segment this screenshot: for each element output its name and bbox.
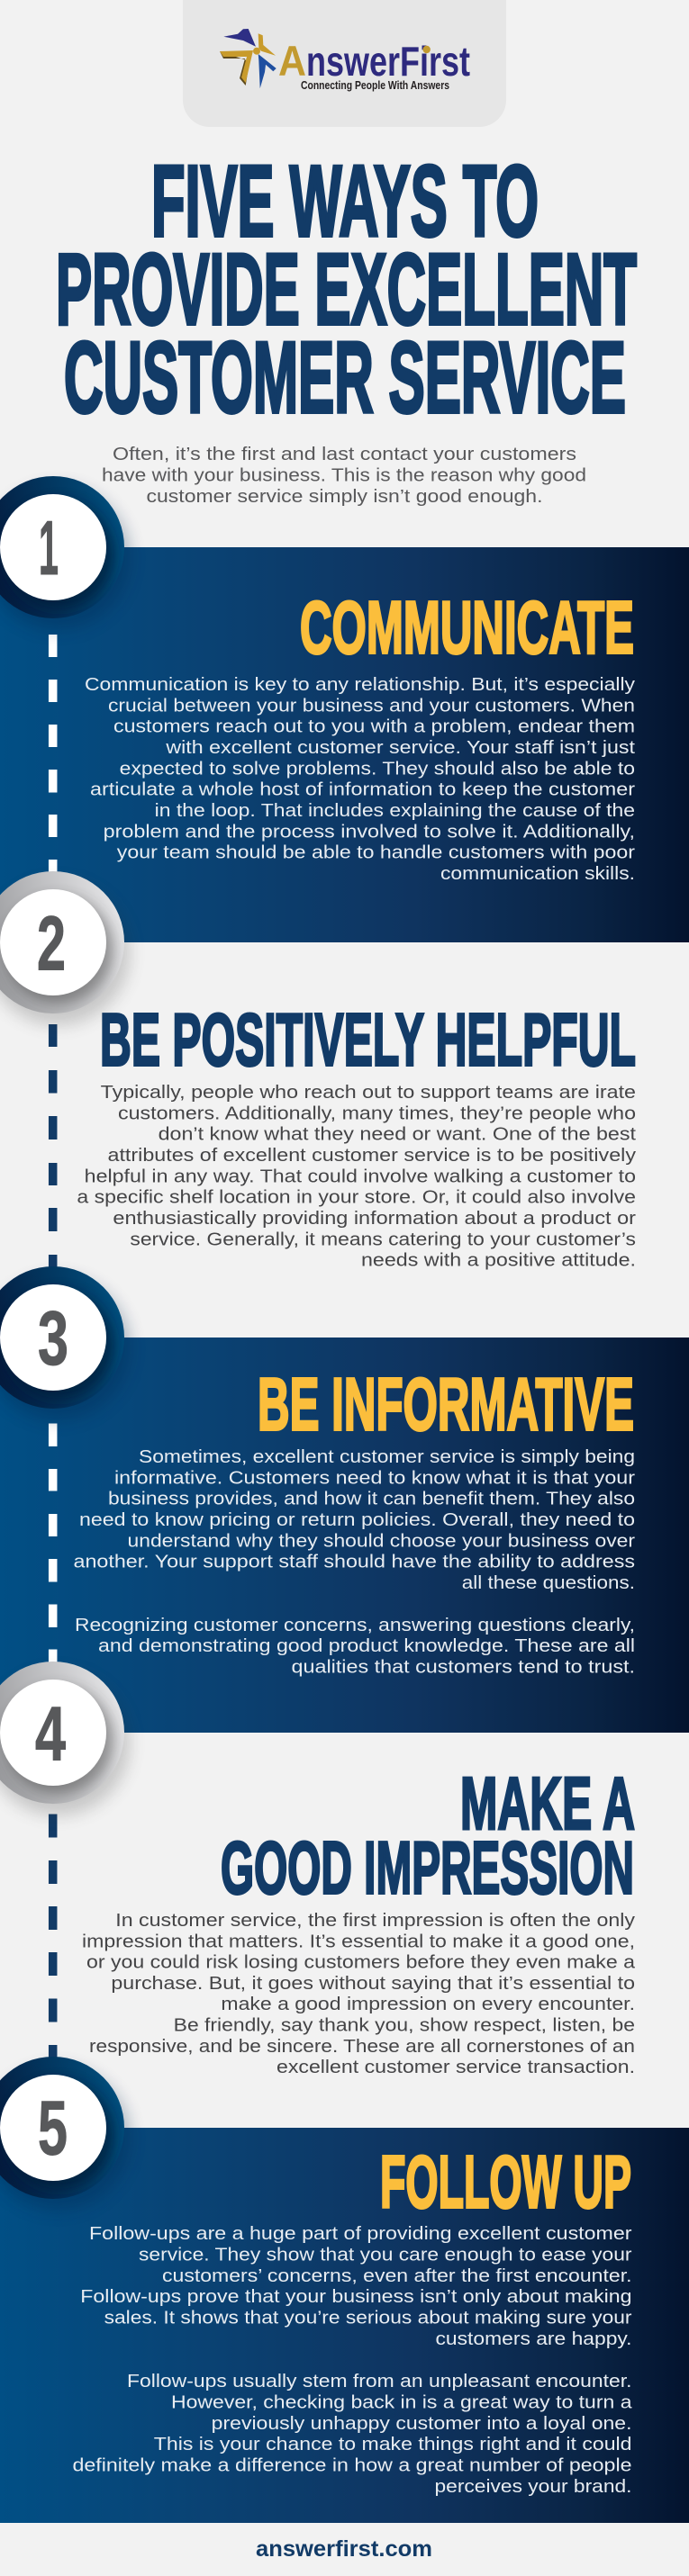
number badge 4 [0, 1662, 130, 1815]
text: be informative body: and demonstrating good product knowledge. These are all [98, 1635, 635, 1656]
text: make a good impression body: In customer service, the first impression is often the only [115, 1910, 636, 1931]
text: be informative body: qualities that customers tend to trust. [292, 1656, 635, 1678]
text: be positively helpful body: needs with a positive attitude. [361, 1250, 636, 1271]
text: make a good impression body: make a good impression on every encounter. [221, 1994, 635, 2014]
intro text: have with your business. This is the reason why good [102, 464, 586, 486]
text: be positively helpful body: a specific shelf location in your store. Or, it could also involve [77, 1187, 636, 1208]
number badge 2: 2 [37, 902, 66, 986]
panel 1: communicate [0, 547, 689, 942]
text: be informative body: all these questions. [462, 1572, 635, 1593]
text: communicate body: crucial between your business and your customers. When [108, 695, 635, 716]
number badge 3: 3 [38, 1296, 68, 1382]
text: follow up body: Follow-ups usually stem from an unpleasant encounter. [127, 2371, 632, 2391]
number badge 3 [0, 1266, 130, 1420]
text: be positively helpful body: service. Generally, it means catering to your customer’s [130, 1229, 636, 1249]
text: follow up body: sales. It shows that you’re serious about making sure your [104, 2308, 632, 2328]
number badge 2 [0, 871, 130, 1025]
text: follow up body: This is your chance to make things right and it could [154, 2434, 632, 2454]
panel 4 heading: make a good impression [221, 1761, 635, 1910]
intro text: Often, it’s the first and last contact your customers [113, 444, 576, 464]
text: make a good impression body: Be friendly, say thank you, show respect, listen, be [174, 2014, 635, 2036]
text: make a good impression body: impression that matters. It’s essential to make it a good one, [82, 1931, 635, 1951]
text: be informative body: need to know pricing or return policies. Overall, they need to [79, 1509, 635, 1530]
text: communicate body: Communication is key to any relationship. But, it’s especially [85, 674, 636, 695]
icon: AnswerFirst star logo [220, 29, 277, 88]
text: communicate body: articulate a whole host of information to keep the customer [90, 779, 635, 800]
panel 3: be informative [0, 1338, 689, 1733]
text: be informative body: Sometimes, excellent customer service is simply being [139, 1446, 635, 1467]
text: be positively helpful body: enthusiastically providing information about a product or [113, 1208, 636, 1229]
dashed connector on panel 1 [49, 635, 57, 878]
text: be informative body: informative. Customers need to know what it is that your [114, 1467, 635, 1488]
text: follow up body: previously unhappy customer into a loyal one. [212, 2413, 631, 2434]
text: make a good impression body: responsive, and be sincere. These are all cornerstones of an [89, 2036, 635, 2057]
number badge 5: 5 [38, 2086, 68, 2171]
text: be informative body: business provides, and how it can benefit them. They also [108, 1489, 635, 1509]
dashed connector from 4 to 5 [49, 1815, 57, 2066]
text: be informative body: Recognizing customer concerns, answering questions clearly, [75, 1615, 635, 1635]
text: communicate body: with excellent customer service. Your staff isn’t just [165, 737, 635, 758]
text: be positively helpful body: helpful in any way. That could involve walking a customer to [85, 1166, 636, 1186]
text: make a good impression body: purchase. But, it goes without saying that it’s essential to [111, 1973, 635, 1994]
number badge 5 [0, 2057, 130, 2211]
panel 5: follow up [0, 2128, 689, 2523]
text: be positively helpful body [77, 1082, 637, 1271]
text: follow up body [72, 2223, 632, 2497]
number badge 4: 4 [35, 1692, 66, 1777]
text: communicate body: problem and the process involved to solve it. Additionally, [104, 821, 635, 842]
text: make a good impression body [82, 1910, 636, 2077]
intro text: customer service simply isn’t good enough. [146, 486, 542, 507]
dashed connector on panel 3 [49, 1424, 57, 1670]
dashed connector from 2 to 3 [49, 1024, 57, 1274]
text: make a good impression body: or you could risk losing customers before they even make a [86, 1952, 636, 1973]
text: be positively helpful body: don’t know what they need or want. One of the best [159, 1124, 636, 1145]
text: be positively helpful body: Typically, people who reach out to support teams are irate [101, 1082, 636, 1103]
text: communicate body: your team should be able to handle customers with poor [117, 842, 635, 863]
text: follow up body: customers’ concerns, even after the first encounter. [162, 2265, 632, 2286]
logo panel [183, 0, 506, 127]
number badge 1: 1 [39, 506, 59, 591]
text: follow up body: However, checking back in is a great way to turn a [171, 2391, 632, 2412]
text: be positively helpful body: customers. Additionally, many times, they’re people who [118, 1103, 636, 1123]
text: be informative body: another. Your support staff should have the ability to address [74, 1552, 635, 1572]
number badge 1 [0, 476, 130, 630]
logo wordmark [278, 37, 470, 85]
text: make a good impression body: excellent customer service transaction. [277, 2057, 635, 2077]
text: communicate body: in the loop. That includes explaining the cause of the [155, 800, 635, 821]
text: be informative body: understand why they should choose your business over [128, 1530, 635, 1551]
text: communicate body: communication skills. [440, 863, 635, 884]
text: communicate body [85, 674, 636, 884]
title [56, 145, 637, 434]
logo tagline: Connecting People With Answers [301, 79, 449, 92]
text: follow up body: Follow-ups are a huge part of providing excellent customer [89, 2223, 632, 2244]
intro text [102, 444, 586, 507]
footer url: answerfirst.com [256, 2536, 432, 2562]
text: follow up body: service. They show that you care enough to ease your [139, 2244, 632, 2265]
text: follow up body: definitely make a difference in how a great number of people [72, 2455, 632, 2476]
text: follow up body: Follow-ups prove that your business isn’t only about making [80, 2286, 632, 2307]
text: be informative body [74, 1446, 635, 1678]
text: follow up body: perceives your brand. [434, 2476, 632, 2497]
logo wordmark: A [278, 37, 306, 85]
text: be positively helpful body: attributes of excellent customer service is to be positively [108, 1145, 637, 1166]
text: follow up body: customers are happy. [436, 2328, 632, 2349]
text: communicate body: customers reach out to you with a problem, endear them [113, 716, 635, 737]
text: communicate body: expected to solve problems. They should also be able to [120, 758, 635, 779]
logo wordmark: nswerFirst [306, 38, 470, 85]
